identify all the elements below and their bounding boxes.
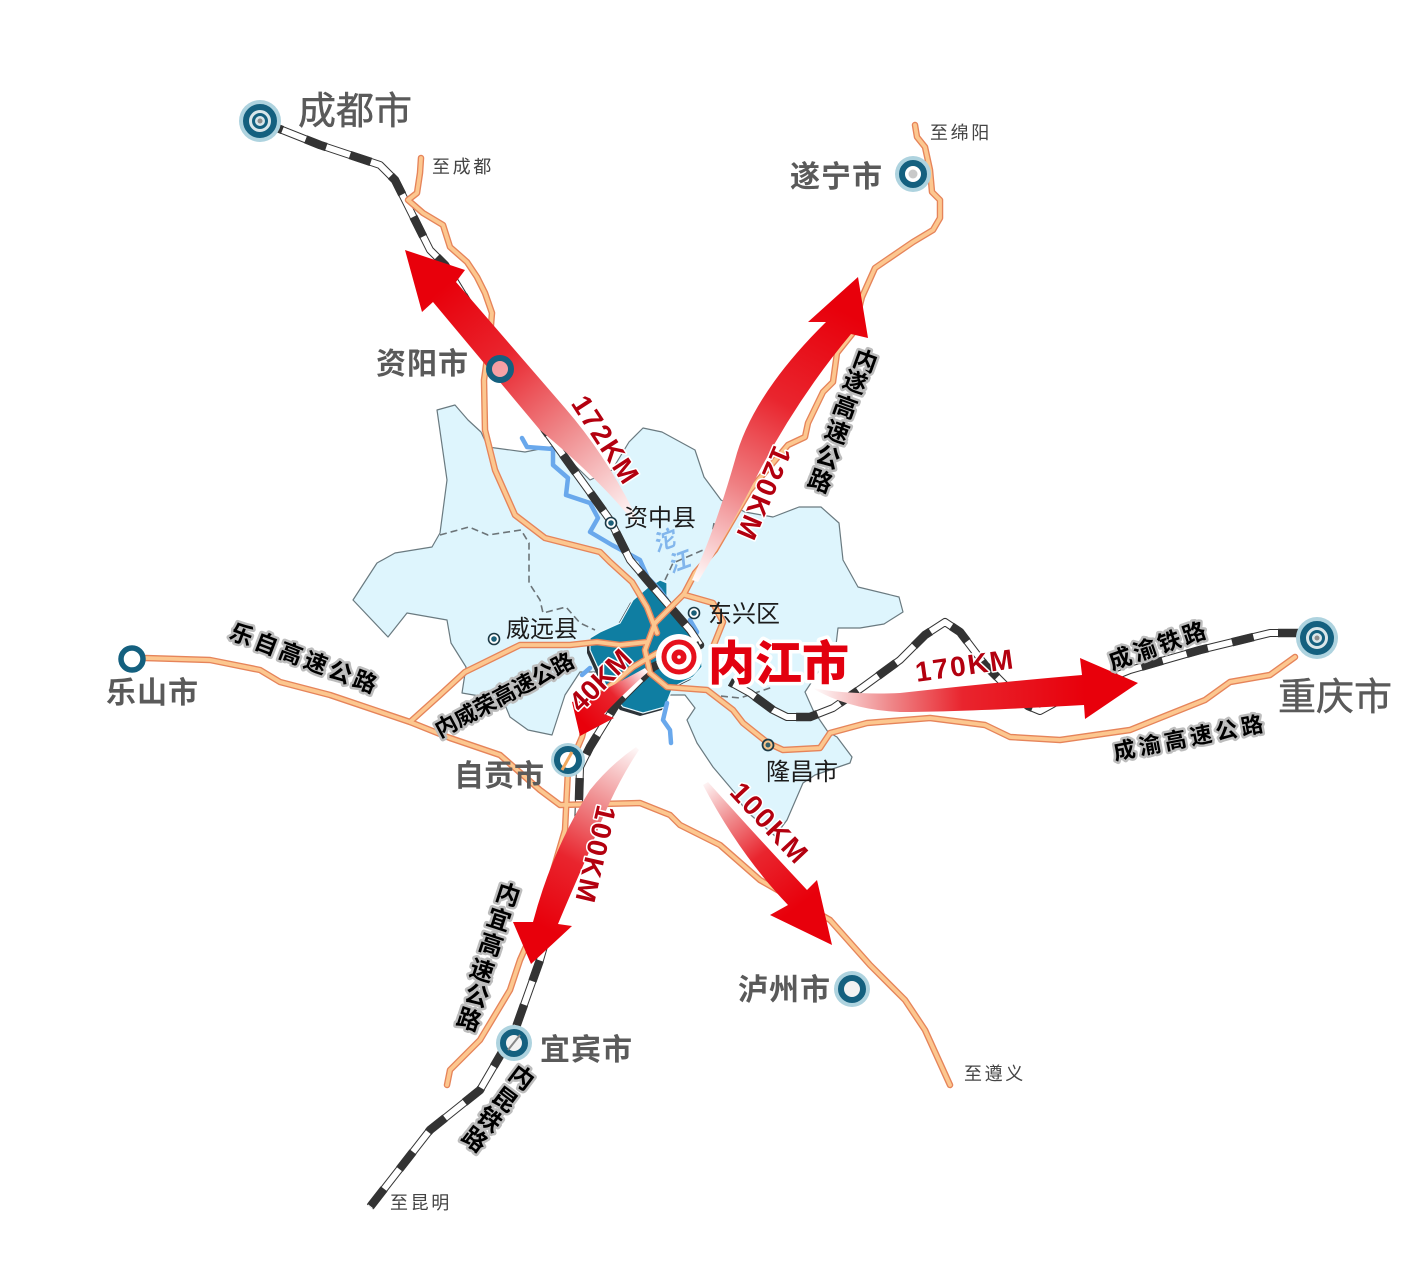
arrow: to Suining <box>692 277 868 582</box>
label: Neikun railway: 内昆铁路 <box>456 1060 539 1158</box>
label: Yibin: 宜宾市 <box>540 1034 633 1067</box>
marker: Yibin <box>496 1025 532 1061</box>
marker: Chongqing <box>1296 617 1338 659</box>
label: to Kunming: 至昆明 <box>390 1193 452 1213</box>
roads: expressway network <box>145 125 1295 1085</box>
marker: Suining <box>895 156 931 192</box>
urban area <box>590 580 702 713</box>
panel: Neijiang region map <box>353 405 903 836</box>
river label: 沱江 <box>649 524 696 578</box>
distance: 100KM south: 100KM <box>569 803 622 907</box>
label: Weiyuan: 威远县 <box>506 616 578 643</box>
label: Longchang: 隆昌市 <box>766 759 838 786</box>
label: Leshan-Zigong expressway: 乐自高速公路 <box>226 618 383 699</box>
label: Chengyu expressway: 成渝高速公路 <box>1111 711 1269 765</box>
railway: Chengdu-Chongqing <box>730 622 1300 717</box>
arrow: to Yibin <box>513 747 639 964</box>
marker: Chengdu <box>239 100 281 142</box>
label: to Chengdu: 至成都 <box>432 157 494 177</box>
arrow: to Luzhou <box>703 782 832 945</box>
label: Neisui expressway: 内遂高速公路 <box>804 345 881 499</box>
label: Neijiang: 内江市 <box>708 637 849 690</box>
distance: 100KM southeast: 100KM <box>724 776 815 871</box>
arrow: to Chongqing <box>812 658 1138 719</box>
label: to Zunyi: 至遵义 <box>964 1064 1026 1084</box>
marker: Leshan <box>121 648 143 670</box>
label: Suining: 遂宁市 <box>790 161 883 194</box>
label: Ziyang: 资阳市 <box>376 348 469 381</box>
marker: Luzhou <box>834 971 870 1007</box>
label: Luzhou: 泸州市 <box>738 974 831 1007</box>
label: Chongqing: 重庆市 <box>1278 677 1392 719</box>
marker: Longchang <box>762 740 774 750</box>
marker: Weiyuan <box>488 634 500 644</box>
distance: 40KM: 40KM <box>563 643 638 718</box>
label: Chengdu: 成都市 <box>298 91 412 133</box>
marker: Zizhong <box>606 518 616 528</box>
label: Neiyi expressway: 内宜高速公路 <box>453 879 523 1037</box>
distance: 170KM: 170KM <box>913 643 1017 688</box>
marker: Dongxing <box>688 608 700 618</box>
distance: 172KM: 172KM <box>565 390 646 491</box>
label: Neiwei-Rong expressway: 内威荣高速公路 <box>431 648 578 742</box>
label: Zizhong: 资中县 <box>624 505 696 532</box>
railway: Chengdu to Kunming <box>262 122 700 1207</box>
county boundaries <box>440 523 773 698</box>
region outline <box>353 405 903 836</box>
arrow: to Chengdu <box>405 250 640 525</box>
urban area shadow <box>587 583 699 716</box>
label: Zigong: 自贡市 <box>454 760 544 793</box>
distance: 120KM: 120KM <box>730 442 797 546</box>
label: Dongxing: 东兴区 <box>708 601 780 628</box>
river: Tuojiang <box>522 438 697 743</box>
arrow: to Zigong <box>572 668 648 736</box>
label: Leshan: 乐山市 <box>106 677 199 710</box>
marker: Zigong <box>551 743 585 777</box>
label: to Mianyang: 至绵阳 <box>930 123 992 143</box>
label: Chengyu railway: 成渝铁路 <box>1105 616 1212 675</box>
marker: Neijiang target <box>656 634 702 680</box>
marker: Ziyang <box>489 358 511 380</box>
